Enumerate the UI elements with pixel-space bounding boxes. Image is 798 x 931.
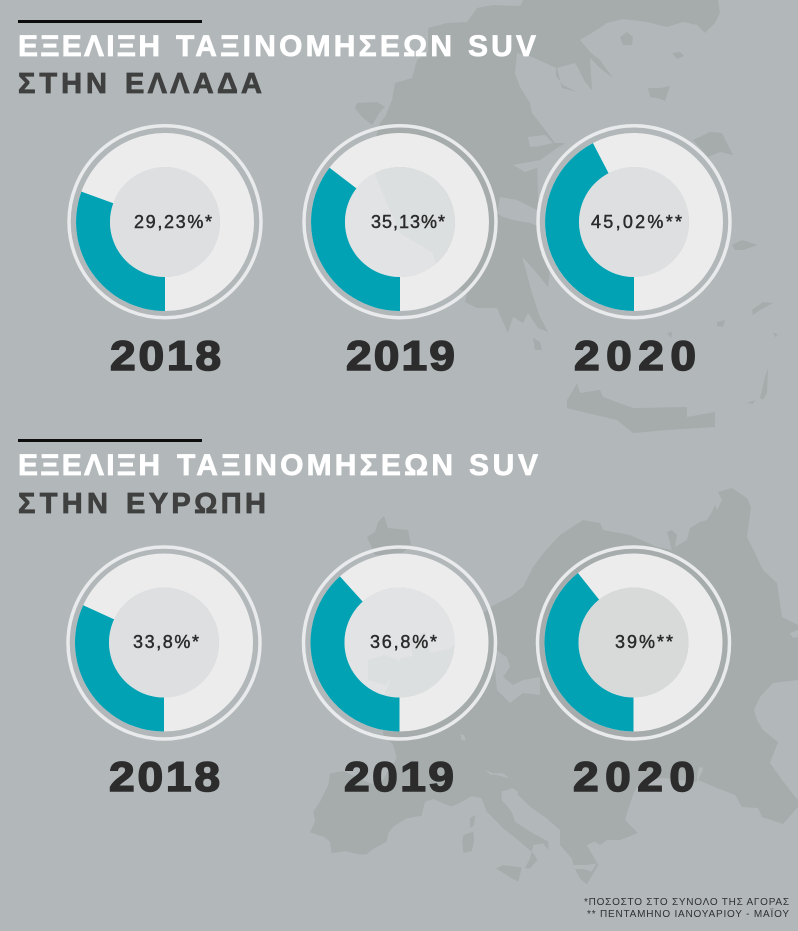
- Caspian light patch: [754, 630, 798, 800]
- Adriatic streaks: [461, 734, 509, 778]
- Sardinia, Corsica, Sicily: [462, 815, 522, 882]
- Corfu: [355, 102, 385, 125]
- donut: Europe 2018: 33,8%*: [133, 632, 199, 652]
- donut: Greece 2018: [69, 126, 261, 318]
- subheading: Greece: [18, 68, 262, 100]
- heading: Greece: ΕΞΕΛΙΞΗ: [18, 30, 160, 63]
- year: Europe 2018: 2018: [109, 754, 220, 801]
- Gulf of Corinth: [497, 197, 540, 227]
- Crete: [567, 383, 715, 433]
- subheading: Greece: ΕΛΛΑΔΑ: [125, 68, 262, 100]
- subheading: Europe: ΕΥΡΩΠΗ: [126, 488, 266, 520]
- map: Greece: [355, 0, 778, 433]
- donut: Greece 2020: 45,02%**: [591, 212, 682, 232]
- donut: Europe 2020: 39%**: [615, 632, 673, 652]
- heading: Europe: [18, 449, 538, 482]
- heading: Greece: SUV: [468, 30, 536, 63]
- year: Europe 2019: 2019: [344, 754, 454, 801]
- heading: Europe: ΕΞΕΛΙΞΗ: [18, 449, 160, 482]
- footnotes: *ΠΟΣΟΣΤΟ ΣΤΟ ΣΥΝΟΛΟ ΤΗΣ ΑΓΟΡΑΣ: [584, 897, 789, 908]
- Russia and Scandinavia: [400, 488, 798, 845]
- donut: Greece 2019: 35,13%*: [371, 212, 445, 232]
- heading: Greece: ΤΑΞΙΝΟΜΗΣΕΩΝ: [176, 30, 452, 63]
- donut: Europe 2019: [304, 547, 496, 739]
- year: Greece 2018: 2018: [110, 333, 221, 380]
- Ireland and Great Britain: [368, 632, 433, 695]
- heading: Greece: [18, 30, 536, 63]
- year: Europe 2020: 2020: [573, 754, 695, 801]
- Pagasetic gulf: [528, 135, 553, 147]
- Greek mainland and Balkans: [370, 0, 720, 333]
- footnotes: ** ΠΕΝΤΑΜΗΝΟ ΙΑΝΟΥΑΡΙΟΥ - ΜΑΪΟΥ: [587, 908, 789, 920]
- heading: Europe: ΤΑΞΙΝΟΜΗΣΕΩΝ: [177, 449, 453, 482]
- donut: Greece 2018: 29,23%*: [134, 212, 212, 232]
- Aegean islands: [533, 32, 778, 404]
- donut: Greece 2019: [304, 126, 496, 318]
- Baltic light patch: [495, 650, 540, 703]
- subheading: Europe: ΣΤΗΝ: [18, 488, 108, 520]
- footnotes: [584, 897, 789, 920]
- subheading: Europe: [18, 488, 266, 520]
- subheading: Greece: ΣΤΗΝ: [18, 68, 107, 100]
- Iceland: [367, 516, 411, 555]
- donut: Europe 2020: [538, 547, 730, 739]
- rule: second heading: [18, 439, 202, 442]
- southern Europe landmass: [310, 642, 723, 884]
- year: Greece 2019: 2019: [346, 333, 455, 380]
- donut: Europe 2018: [68, 547, 260, 739]
- year: Greece 2020: 2020: [574, 333, 696, 380]
- map: Europe: [310, 488, 798, 884]
- Evia channel: [513, 144, 563, 172]
- heading: Europe: SUV: [469, 449, 538, 482]
- donut: Europe 2019: 36,8%*: [370, 632, 437, 652]
- rule: top heading: [18, 20, 202, 23]
- donut: Greece 2020: [538, 126, 730, 318]
